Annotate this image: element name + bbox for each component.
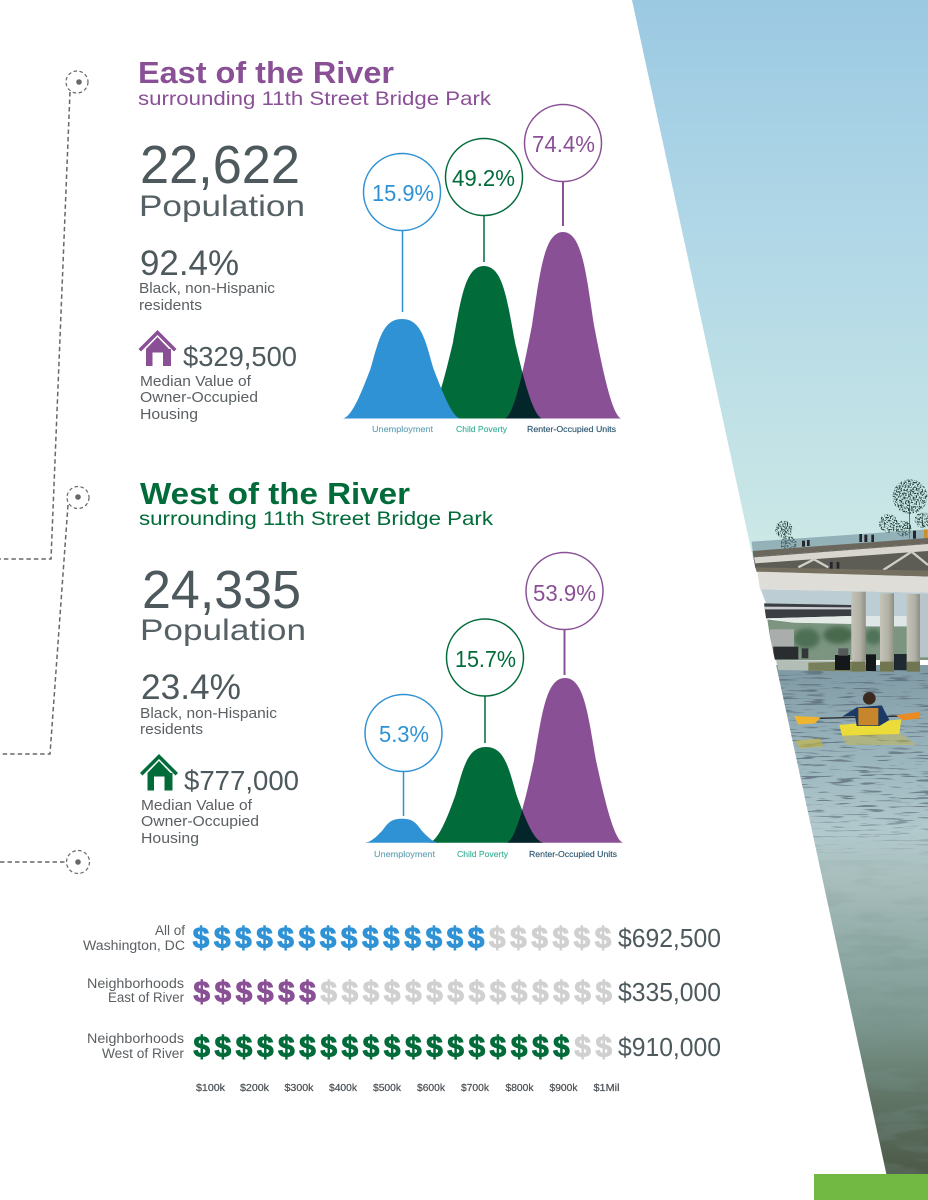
curve: unemployment — [365, 819, 439, 843]
population East: Population — [139, 190, 305, 223]
callout: 15.9%: 15.9% — [372, 180, 434, 206]
median housing value West: $777,000 — [184, 765, 299, 796]
water swell — [858, 1046, 928, 1174]
median housing value East: Housing — [140, 407, 198, 423]
callout: 53.9% — [526, 552, 603, 675]
callout: 5.3%: 5.3% — [379, 721, 429, 747]
heading: West of the River: West of the River — [140, 477, 410, 511]
population West: 24,335 — [142, 560, 301, 620]
pillars — [851, 592, 866, 672]
value axis ticks: $800k — [506, 1082, 534, 1094]
row: All of Washington, DC: Washington, DC — [83, 938, 185, 953]
median housing value East: Median Value of — [140, 374, 252, 390]
Black residents share East: Black, non-Hispanic — [139, 281, 275, 297]
median housing value East: Owner-Occupied — [140, 390, 258, 406]
kayak reflection — [795, 738, 823, 748]
chart labels East — [372, 425, 616, 434]
chart labels West — [374, 850, 617, 859]
row: Neighborhoods West of River — [87, 1031, 721, 1064]
value axis ticks: $400k — [329, 1082, 358, 1094]
value axis ticks: $1Mil — [594, 1082, 620, 1094]
water — [776, 665, 928, 1174]
median housing value West: Median Value of — [141, 798, 253, 814]
distant hills — [767, 619, 928, 660]
median housing value West — [141, 765, 299, 847]
kayak hull — [839, 719, 901, 736]
callout: 49.2%: 49.2% — [452, 165, 515, 191]
icon: purple house — [138, 330, 176, 366]
callout: 49.2% — [446, 138, 522, 262]
row: All of Washington, DC — [83, 922, 721, 955]
pedestrians — [802, 529, 927, 569]
row: Neighborhoods West of River: $$$$$$$$$$$$$$$$$$ — [193, 1031, 570, 1064]
upper deck — [753, 538, 928, 557]
curve: child poverty — [426, 266, 542, 418]
Black residents share West: residents — [140, 722, 203, 738]
chart labels West: Unemployment — [374, 850, 436, 859]
lower deck — [757, 572, 928, 593]
under-deck — [761, 589, 928, 627]
lower railing — [755, 567, 928, 577]
bell chart East — [343, 104, 621, 434]
row: All of Washington, DC: $$$$$$ — [489, 922, 612, 955]
subheading East: surrounding 11th Street Bridge Park — [138, 88, 491, 110]
dashed connector: East — [0, 71, 88, 559]
sky — [632, 0, 928, 560]
bridge — [752, 479, 928, 748]
bell chart West — [365, 552, 623, 859]
heading: East of the River: East of the River — [138, 56, 394, 90]
value axis ticks: $500k — [373, 1082, 402, 1094]
curve overlap — [505, 372, 542, 418]
callout: 5.3% — [365, 694, 442, 816]
value axis ticks: $600k — [417, 1082, 446, 1094]
callout: 15.7% — [446, 619, 524, 743]
chart labels East: Renter-Occupied Units — [527, 425, 616, 434]
panel: East of the River — [138, 56, 621, 434]
row: All of Washington, DC: $$$$$$$$$$$$$$ — [193, 922, 485, 955]
panel: median home value pictogram — [83, 922, 721, 1094]
row: Neighborhoods East of River: East of River — [108, 990, 184, 1005]
water ripples — [778, 670, 928, 854]
row: Neighborhoods East of River: $$$$$$ — [193, 976, 316, 1009]
curve: unemployment — [343, 319, 460, 418]
value axis ticks: $200k — [240, 1082, 270, 1094]
curve: renter-occupied units — [507, 678, 623, 843]
row: All of Washington, DC: All of — [155, 923, 185, 938]
row: Neighborhoods East of River: $335,000 — [618, 979, 721, 1007]
Black residents share East: 92.4% — [140, 244, 239, 283]
trusses — [798, 552, 928, 570]
row: Neighborhoods West of River: $$ — [574, 1031, 612, 1064]
icon: green house — [140, 754, 178, 790]
row: Neighborhoods East of River: Neighborhoods — [87, 976, 184, 991]
curve: child poverty — [429, 747, 543, 843]
value axis ticks — [196, 1082, 620, 1094]
Black residents share West: Black, non-Hispanic — [140, 706, 277, 722]
chart labels West: Renter-Occupied Units — [529, 850, 617, 859]
median housing value West: Owner-Occupied — [141, 814, 259, 830]
curve overlap — [507, 810, 543, 843]
chart labels West: Child Poverty — [457, 850, 508, 859]
trees — [775, 479, 928, 552]
population West: Population — [140, 614, 306, 647]
row: All of Washington, DC: $692,500 — [618, 925, 721, 953]
Black residents share East — [139, 244, 275, 314]
dashed connector: West — [0, 486, 89, 754]
paddle — [794, 712, 920, 724]
green corner tab — [814, 1174, 928, 1200]
population East — [139, 135, 305, 223]
chart labels East: Unemployment — [372, 425, 434, 434]
population East: 22,622 — [140, 135, 300, 195]
chart labels East: Child Poverty — [456, 425, 507, 434]
callout: 53.9%: 53.9% — [533, 580, 596, 606]
Black residents share West: 23.4% — [141, 668, 241, 707]
curve: renter-occupied units — [505, 232, 621, 418]
photo panel: kayaker beneath the bridge — [632, 0, 928, 1200]
median housing value East — [140, 341, 297, 423]
value axis ticks: $100k — [196, 1082, 226, 1094]
Black residents share East: residents — [139, 298, 202, 314]
median housing value East: $329,500 — [183, 341, 297, 372]
population West — [140, 560, 306, 647]
median housing value West: Housing — [141, 831, 199, 847]
callout: 74.4%: 74.4% — [532, 131, 595, 157]
panel: West of the River — [139, 477, 623, 859]
row: Neighborhoods West of River: Neighborhoods — [87, 1031, 184, 1046]
subheading West: surrounding 11th Street Bridge Park — [139, 508, 493, 530]
kayaker — [842, 692, 889, 726]
row: Neighborhoods West of River: West of River — [102, 1046, 184, 1061]
row: Neighborhoods East of River — [87, 976, 721, 1009]
callout: 15.7%: 15.7% — [455, 646, 516, 672]
upper railing — [752, 529, 928, 551]
dashed connector: lower — [0, 850, 90, 874]
callout: 74.4% — [524, 104, 602, 226]
value axis ticks: $900k — [550, 1082, 578, 1094]
callout: 15.9% — [364, 154, 440, 312]
row: Neighborhoods West of River: $910,000 — [618, 1034, 721, 1062]
row: Neighborhoods East of River: $$$$$$$$$$$$$$ — [320, 976, 612, 1009]
value axis ticks: $300k — [284, 1082, 314, 1094]
Black residents share West — [140, 668, 277, 738]
value axis ticks: $700k — [461, 1082, 490, 1094]
shore and pilings — [776, 660, 851, 671]
